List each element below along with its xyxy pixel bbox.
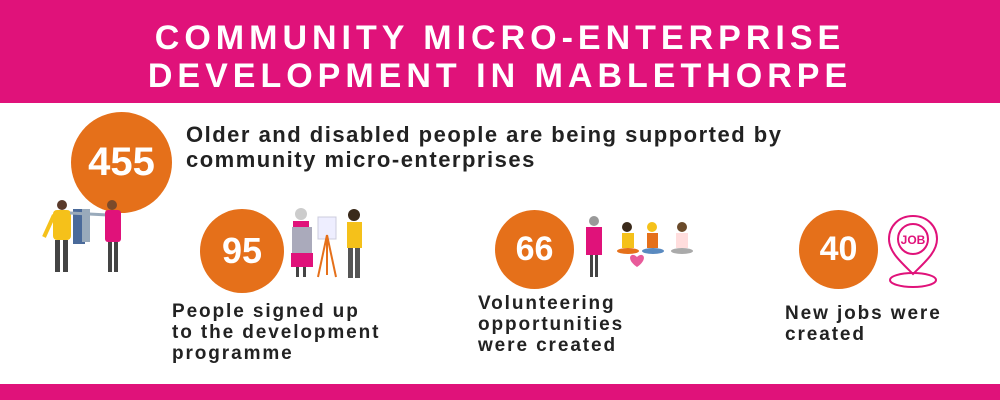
illustration: painting — [291, 208, 362, 278]
stat 95 text — [172, 301, 380, 364]
stat 40 circle — [799, 210, 878, 289]
stat 66 text: were created — [478, 335, 617, 356]
stat 455 text — [186, 122, 782, 172]
stat 95 circle — [200, 209, 284, 293]
stat 66 text — [478, 293, 624, 356]
stat 95 text: People signed up — [172, 301, 360, 322]
stat 40 text: created — [785, 324, 866, 345]
stat 40 circle: 40 — [820, 230, 857, 268]
illustration: volunteers — [586, 216, 693, 277]
illustration: two people with clothes — [42, 200, 121, 272]
stat 455 circle: 455 — [88, 140, 155, 184]
stat 455 circle — [71, 112, 172, 213]
stat 40 text: New jobs were — [785, 303, 942, 324]
stat 95 text: to the development — [172, 322, 380, 343]
stat 66 text: Volunteering — [478, 293, 616, 314]
stat 455 text: community micro-enterprises — [186, 147, 536, 172]
footer bar — [0, 384, 1000, 400]
stat 455 text: Older and disabled people are being supported by — [186, 122, 782, 147]
stat 95 circle: 95 — [222, 230, 262, 271]
title: COMMUNITY MICRO-ENTERPRISE — [155, 19, 845, 57]
title: DEVELOPMENT IN MABLETHORPE — [148, 57, 852, 95]
icon: job location pin — [888, 215, 938, 288]
header banner — [0, 0, 1000, 103]
stat 66 circle — [495, 210, 574, 289]
stat 95 text: programme — [172, 343, 294, 364]
stat 40 text — [785, 303, 942, 345]
stat 66 circle: 66 — [516, 230, 553, 268]
icon: job location pin: JOB — [901, 233, 926, 247]
stat 66 text: opportunities — [478, 314, 624, 335]
title — [148, 19, 852, 95]
